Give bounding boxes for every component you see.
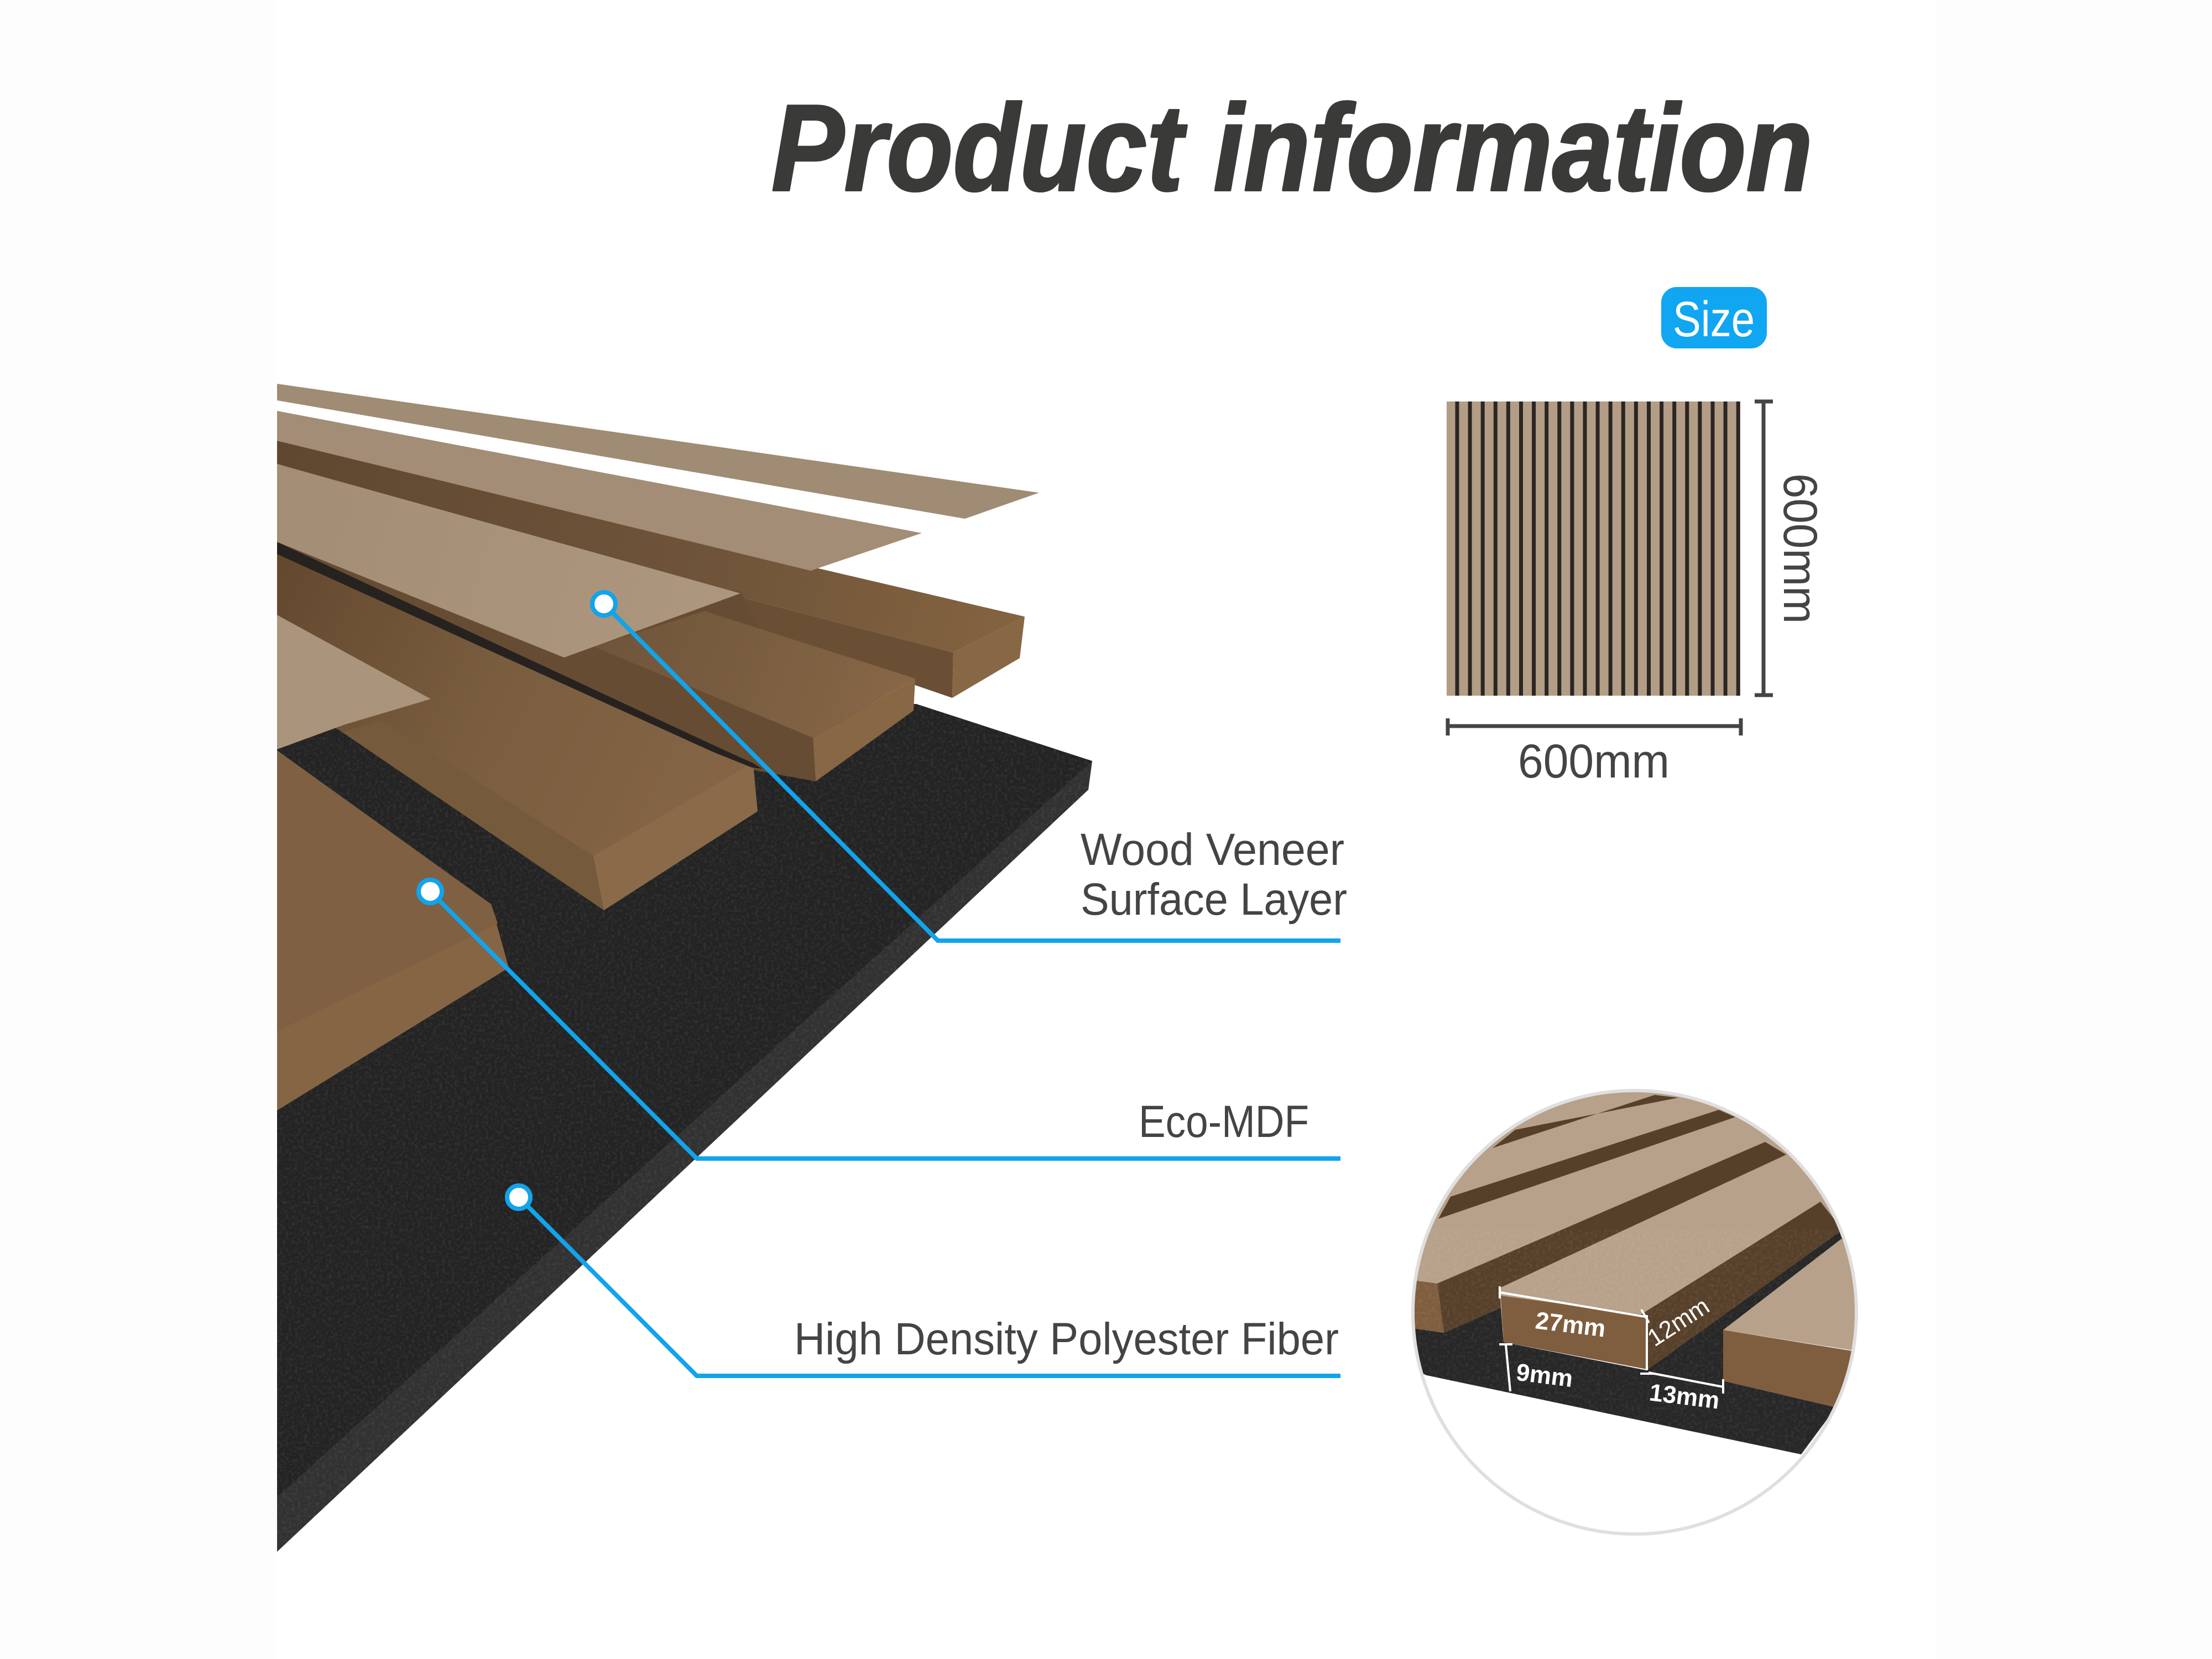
callout: High Density Polyester Fiber [507,1186,1340,1376]
dimension: horizontal 600mm: 600mm [1518,735,1670,788]
panel: magnified slat detail circle [1405,1089,1864,1548]
label 12mm: 12mm [1643,1292,1714,1352]
layer: veneer strip third [277,464,740,658]
layer: dark groove [277,542,762,769]
layer: middle MDF slat [277,531,915,781]
layer: front MDF slat top [277,547,758,910]
panel: page background [276,0,1936,1659]
label 9mm: 9mm [1515,1359,1574,1392]
layer: high density polyester fiber felt [277,702,1092,1552]
callout: Eco-MDF [419,880,1340,1159]
panel: exploded layer illustration [277,384,1092,1552]
callout: Wood Veneer Surface Layer: Wood Veneer [1081,825,1344,875]
dimension lines in detail [1499,1286,1723,1394]
layer: veneer strip fourth [277,615,431,749]
layer: veneer strip second [277,411,922,571]
dimension: horizontal 600mm [1448,718,1741,788]
callout: Wood Veneer Surface Layer [592,592,1347,941]
panel swatch with slat stripes [1447,401,1740,696]
label 27mm: 27mm [1534,1307,1607,1343]
callout: Wood Veneer Surface Layer: Surface Layer [1081,874,1347,925]
dimension: vertical 600mm: 600mm [1773,473,1827,624]
label 13mm: 13mm [1648,1379,1721,1415]
layer: veneer strip top [277,384,1039,519]
callout: High Density Polyester Fiber: High Density Polyester Fiber [794,1314,1339,1364]
layer: Eco-MDF front slat [277,750,509,1110]
layer: back MDF slat [277,441,1025,698]
badge: Size: Size [1673,292,1755,347]
title: Product information [771,80,1813,217]
dimension: vertical 600mm [1755,401,1827,695]
callout: Eco-MDF: Eco-MDF [1139,1097,1309,1147]
